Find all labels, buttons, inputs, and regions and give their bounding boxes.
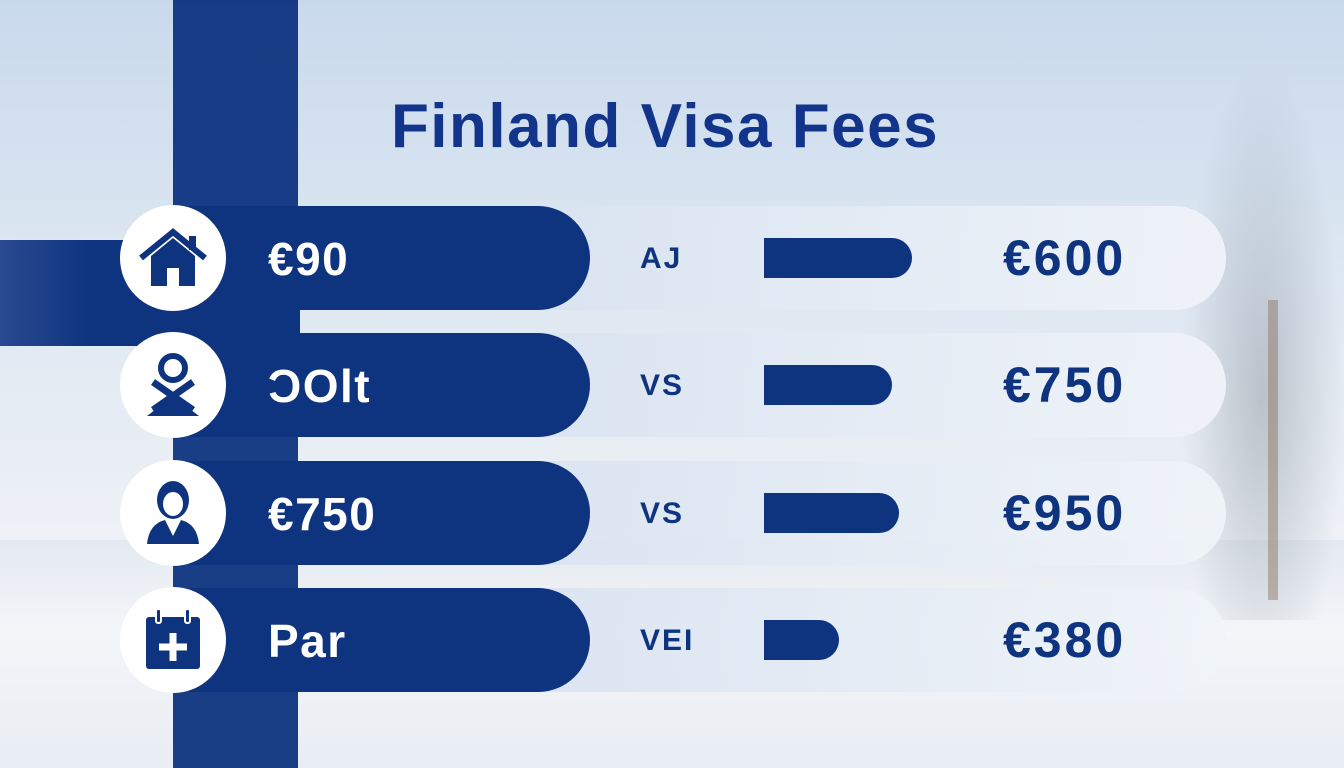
- row 4: €380: [1003, 612, 1126, 668]
- tree trunk: [1268, 300, 1278, 600]
- icon: person: [120, 332, 226, 438]
- tree: [1180, 60, 1344, 620]
- icon: house: [120, 205, 226, 311]
- row 3: [120, 460, 1226, 566]
- row 4: Par: [268, 615, 347, 667]
- row 3: €750: [268, 488, 376, 540]
- row 2: VS: [640, 369, 684, 402]
- row 2: €750: [1003, 357, 1126, 413]
- row 3: VS: [640, 497, 684, 530]
- row 1: €600: [1003, 230, 1126, 286]
- row 1: €90: [268, 233, 349, 285]
- flag horizontal band: [0, 240, 300, 346]
- row 2: [120, 332, 1226, 438]
- row 3: €950: [1003, 485, 1126, 541]
- row 2: ƆOlt: [268, 360, 371, 412]
- row 4: [120, 587, 1222, 693]
- snow ground: [0, 540, 1344, 768]
- icon: calendar plus: [120, 587, 226, 693]
- row 4: VEI: [640, 624, 694, 657]
- title: Finland Visa Fees: [391, 92, 939, 161]
- flag vertical bar: [173, 0, 298, 768]
- icon: woman: [120, 460, 226, 566]
- row 1: [120, 205, 1226, 311]
- row 1: AJ: [640, 242, 682, 275]
